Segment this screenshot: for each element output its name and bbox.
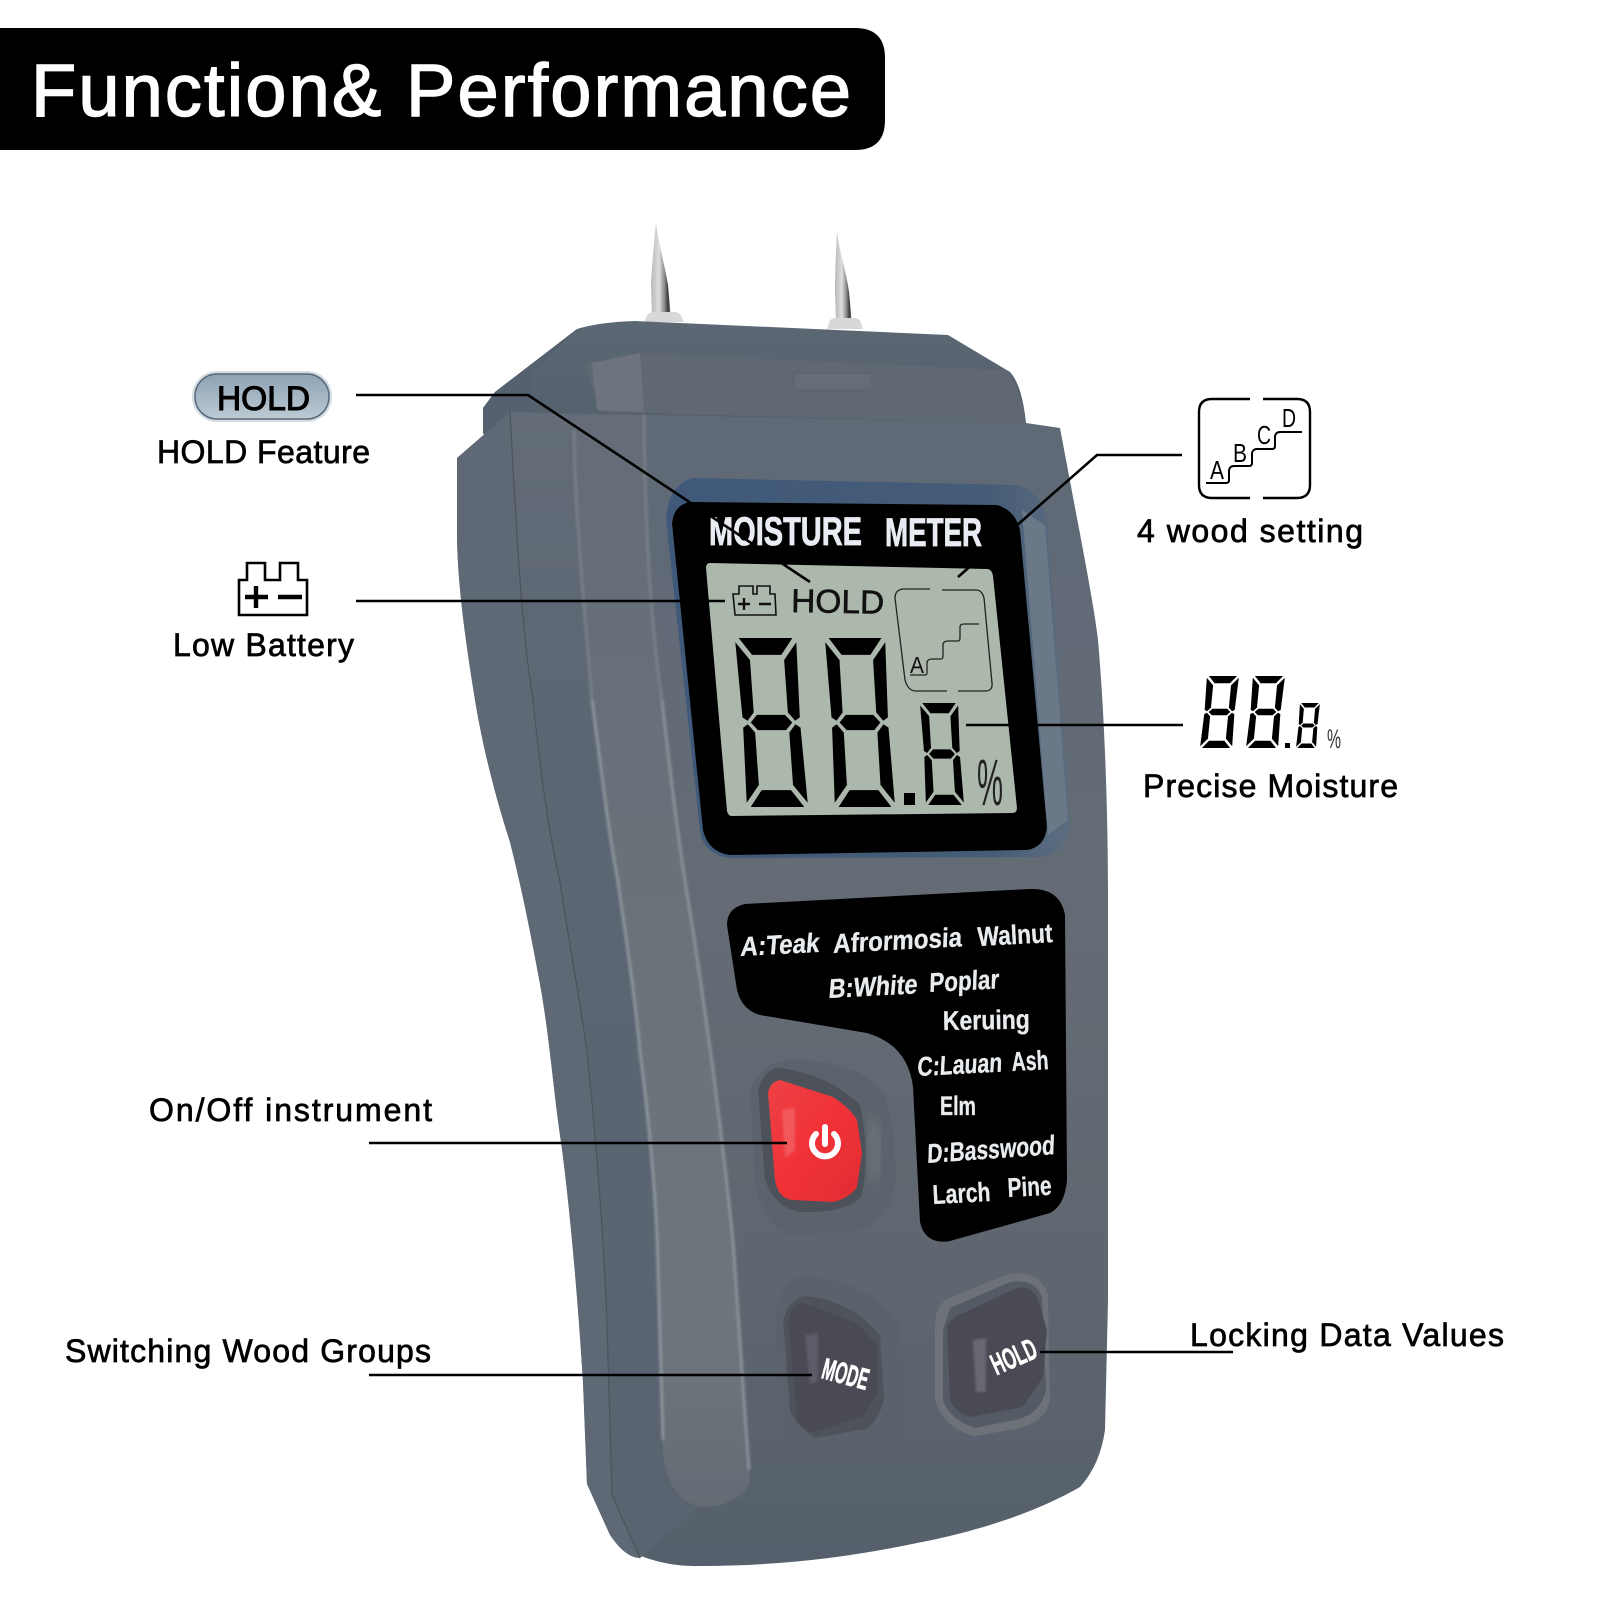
leader line — [356, 600, 725, 602]
LCD wood group box — [895, 589, 992, 691]
wood list text — [739, 918, 1056, 1210]
label: 4 wood setting — [1137, 513, 1363, 549]
power button — [750, 1060, 895, 1235]
dark crease — [510, 412, 640, 1558]
wood list text: Keruing — [943, 1004, 1030, 1036]
ridge highlights — [592, 700, 663, 1440]
black screen frame — [672, 502, 1047, 855]
side panel facet — [457, 412, 640, 1558]
icon: 88.8 percent readout: % — [1327, 724, 1341, 754]
inner shaded strip — [510, 412, 700, 1558]
icon: 88.8 percent readout — [1200, 676, 1341, 754]
icon: wood steps: B — [1233, 438, 1247, 468]
label: Switching Wood Groups — [65, 1333, 431, 1369]
leader line — [1040, 1351, 1233, 1353]
wood list text: Afrormosia — [833, 922, 964, 959]
HOLD button — [935, 1274, 1050, 1436]
leader line — [958, 455, 1182, 577]
wood list text: A:Teak — [739, 927, 822, 962]
label: Locking Data Values — [1190, 1317, 1504, 1353]
LCD battery indicator — [733, 586, 776, 615]
device main body — [457, 412, 1108, 1566]
wood list text: Poplar — [929, 964, 1000, 998]
label: HOLD Feature — [157, 434, 370, 470]
leader line — [369, 1142, 787, 1144]
icon: HOLD pill — [192, 371, 332, 422]
wood list text: Larch — [932, 1177, 991, 1210]
MODE button — [775, 1275, 908, 1452]
LCD reading segments 88.8 — [735, 638, 964, 807]
leader line — [966, 724, 1183, 726]
icon: wood steps: D — [1282, 403, 1296, 433]
title banner — [0, 28, 885, 150]
LCD screen: A — [910, 652, 925, 678]
LCD HOLD label: HOLD — [791, 582, 885, 621]
wood list text: Walnut — [977, 918, 1053, 952]
label: On/Off instrument — [149, 1092, 432, 1128]
wood list text: Pine — [1007, 1171, 1052, 1203]
wood group panel — [727, 889, 1067, 1242]
icon: wood steps: A — [1210, 455, 1225, 485]
icon: wood steps — [1199, 399, 1310, 498]
wood list text: Elm — [940, 1091, 976, 1121]
callout: 4 wood setting — [958, 399, 1363, 577]
screen bezel — [666, 478, 1070, 858]
label: Precise Moisture — [1143, 768, 1398, 804]
leader line — [369, 1374, 812, 1376]
display title: METER — [885, 511, 982, 555]
icon: battery — [239, 563, 307, 615]
LCD screen: % — [977, 745, 1003, 819]
callout: HOLD feature — [157, 371, 810, 582]
power symbol — [812, 1127, 838, 1156]
MODE label: MODE — [818, 1353, 872, 1397]
wood list text: B:White — [827, 968, 919, 1004]
label: Low Battery — [173, 627, 354, 663]
wood list text: Ash — [1011, 1045, 1049, 1077]
moisture meter device — [457, 223, 1108, 1566]
callout: precise moisture — [966, 676, 1398, 804]
probe pins — [644, 223, 863, 329]
title banner: Function& Performance — [31, 49, 851, 132]
display title: MOISTURE — [709, 510, 862, 554]
HOLD button label: HOLD — [986, 1333, 1042, 1382]
icon: wood steps: C — [1257, 420, 1271, 450]
callout: low battery — [173, 563, 725, 663]
raised centre strip — [574, 415, 750, 1507]
icon: HOLD pill: HOLD — [217, 380, 310, 418]
device top cap — [483, 321, 1030, 445]
wood list text: C:Lauan — [917, 1047, 1003, 1082]
leader line — [356, 395, 810, 582]
wood list text: D:Basswood — [927, 1129, 1056, 1169]
LCD screen — [706, 563, 1017, 819]
